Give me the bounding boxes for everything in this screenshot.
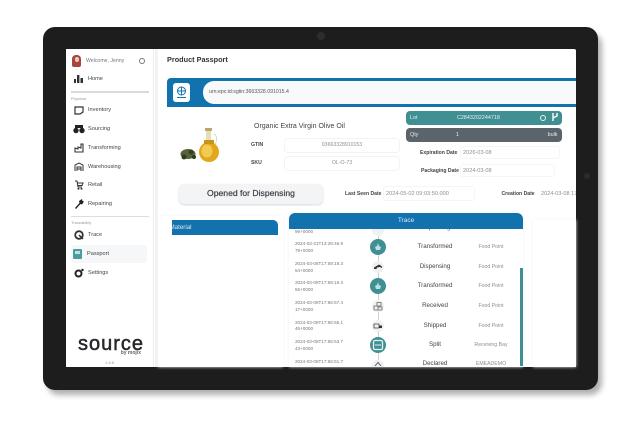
sidebar bbox=[66, 49, 154, 367]
icon: row 7 bbox=[370, 337, 386, 353]
icon: row 3 bbox=[372, 261, 384, 273]
section label: traceability: Traceability bbox=[71, 220, 91, 225]
passport mark bbox=[75, 251, 80, 254]
row 4 timestamp: 2024-03-08T17:59:19.3 bbox=[295, 280, 343, 285]
row 6 timestamp: 46+0000 bbox=[295, 326, 313, 331]
url field bbox=[203, 81, 576, 104]
nav: settings: Settings bbox=[88, 270, 108, 276]
row 4 timestamp bbox=[295, 280, 343, 292]
material header bbox=[172, 220, 278, 235]
panel: right blank bbox=[533, 220, 576, 367]
icon: row 4 bbox=[370, 278, 386, 294]
row 1 event: Dispensing bbox=[420, 224, 450, 231]
lot branch icon bbox=[552, 113, 558, 121]
row 8 event: Declared bbox=[423, 360, 447, 367]
last seen value: 2024-05-02 09:03:50.000 bbox=[386, 191, 449, 197]
row 3 location: Food Point bbox=[478, 264, 504, 270]
row 7 event: Split bbox=[429, 341, 441, 348]
nav: trace: Trace bbox=[88, 232, 102, 238]
panel: material bbox=[158, 216, 283, 367]
sku field bbox=[284, 156, 400, 170]
icon: warehousing bbox=[74, 162, 84, 171]
row 4 location: Food Point bbox=[478, 283, 504, 289]
content gutter bbox=[155, 49, 158, 367]
row 2 timestamp bbox=[295, 241, 343, 252]
row 7 timestamp: 2024-03-08T17:56:53.7 bbox=[295, 339, 343, 344]
panel: trace bbox=[289, 213, 523, 367]
row 5 location: Food Point bbox=[478, 303, 504, 309]
lot value: C2843202244718 bbox=[457, 114, 500, 120]
nav: inventory: Inventory bbox=[88, 107, 111, 113]
row 1 clipped: 96+0000 bbox=[295, 229, 313, 234]
last seen label: Last Seen Date bbox=[345, 191, 382, 197]
icon: row 2 bbox=[370, 239, 386, 255]
row 4 event: Transformed bbox=[418, 282, 452, 289]
row 5 timestamp: 17+0000 bbox=[295, 306, 313, 312]
row 3 timestamp: 2024-03-08T17:59:19.3 bbox=[295, 261, 343, 266]
nav: repairing: Repairing bbox=[88, 201, 112, 207]
status: opened for dispensing: Opened for Dispensing bbox=[207, 188, 295, 198]
row 2 timestamp: 2024-03-21T13:28:46.9 bbox=[295, 241, 343, 246]
row 3 timestamp: 54+0000 bbox=[295, 268, 313, 272]
side sensor bbox=[584, 173, 590, 179]
qty label: Qty bbox=[410, 132, 418, 138]
qty bar bbox=[406, 128, 562, 142]
icon: row 5 bbox=[372, 300, 384, 312]
logo: source by mojix bbox=[78, 332, 144, 356]
url field: urn:epc:id:sgtin:3663328.091015.4 bbox=[209, 89, 289, 95]
row 7 location: Receiving Bay bbox=[474, 342, 508, 348]
row 2 location: Food Point bbox=[478, 244, 504, 250]
row 6 event: Shipped bbox=[424, 322, 446, 329]
power icon bbox=[139, 58, 145, 64]
expiration value: 2026-03-08 bbox=[463, 150, 492, 156]
sku field: OL-O-73 bbox=[332, 160, 352, 166]
row 6 timestamp: 2024-03-08T17:56:55.1 bbox=[295, 320, 343, 324]
last seen field bbox=[383, 186, 475, 201]
status: opened for dispensing bbox=[179, 184, 323, 204]
trace scrollbar bbox=[520, 268, 522, 366]
heading: product passport: Product Passport bbox=[167, 55, 228, 64]
row 3 event: Dispensing bbox=[420, 263, 450, 270]
icon: globe bbox=[173, 83, 190, 102]
trace header: Trace bbox=[398, 217, 414, 224]
gtin field: 03663328910153 bbox=[322, 142, 362, 148]
icon: transforming bbox=[74, 144, 84, 152]
nav: transforming: Transforming bbox=[88, 145, 121, 151]
icon: retail bbox=[75, 180, 84, 190]
section label: physical: Physical bbox=[71, 96, 86, 100]
gtin label: GTIN bbox=[251, 142, 263, 148]
row 7 timestamp: 43+0000 bbox=[295, 346, 313, 350]
row 6 location: Food Point bbox=[478, 323, 504, 329]
packaging field bbox=[460, 164, 555, 177]
icon: settings bbox=[74, 268, 84, 278]
row 4 timestamp: 55+0000 bbox=[295, 286, 313, 292]
tablet bbox=[43, 27, 598, 390]
nav: warehousing: Warehousing bbox=[88, 164, 121, 170]
gtin field bbox=[284, 138, 400, 153]
nav: passport: Passport bbox=[87, 251, 109, 257]
product image: olive oil bbox=[180, 128, 219, 162]
row 1 location: Food Point bbox=[478, 225, 504, 231]
expiration label: Expiration Date bbox=[420, 150, 457, 156]
row 5 event: Received bbox=[422, 302, 448, 309]
icon: row 6 bbox=[372, 320, 384, 332]
icon: trace bbox=[74, 230, 84, 240]
row 5 timestamp: 2024-03-08T17:56:57.4 bbox=[295, 300, 343, 305]
row 7 timestamp bbox=[295, 339, 343, 350]
avatar bbox=[72, 55, 81, 67]
icon: passport bbox=[73, 249, 82, 259]
packaging label: Packaging Date bbox=[421, 168, 459, 174]
qty value: 1 bbox=[456, 132, 459, 138]
globe glyph bbox=[177, 86, 186, 98]
creation label: Creation Date bbox=[502, 191, 535, 197]
icon: home bbox=[74, 75, 83, 83]
trace header bbox=[289, 213, 523, 229]
sku label: SKU bbox=[251, 160, 262, 166]
screen bbox=[66, 49, 576, 367]
logo word: source bbox=[78, 332, 144, 354]
nav: retail: Retail bbox=[88, 182, 102, 188]
row 6 timestamp bbox=[295, 320, 343, 331]
camera bbox=[317, 32, 325, 40]
product name: Organic Extra Virgin Olive Oil bbox=[254, 122, 345, 130]
lot bar bbox=[406, 110, 562, 124]
icon: inventory bbox=[74, 106, 84, 115]
row 2 timestamp: 79+0000 bbox=[295, 248, 313, 252]
avatar face bbox=[74, 57, 78, 62]
logo tagline: by mojix bbox=[121, 350, 141, 356]
icon: sourcing bbox=[73, 125, 85, 134]
expiration field bbox=[460, 146, 560, 159]
url bar bbox=[167, 78, 576, 106]
nav: sourcing: Sourcing bbox=[88, 126, 110, 132]
qty unit: bulk bbox=[548, 132, 558, 138]
divider bbox=[71, 91, 149, 92]
lot clock icon bbox=[540, 114, 546, 120]
welcome text: Welcome, Jenny bbox=[86, 58, 124, 64]
row 8 timestamp: 2024-03-08T17:56:51.7 bbox=[295, 358, 343, 364]
divider bbox=[71, 216, 149, 217]
row 8 location: EMEADEMO bbox=[476, 361, 506, 367]
row 5 timestamp bbox=[295, 300, 343, 312]
icon: row 1 bbox=[372, 224, 384, 236]
row 2 event: Transformed bbox=[418, 243, 452, 250]
icon: row 8 bbox=[372, 360, 384, 367]
trace connector line bbox=[378, 229, 379, 367]
icon: repairing bbox=[75, 199, 84, 209]
tablet shadow bbox=[47, 33, 602, 395]
nav highlight: passport bbox=[71, 245, 147, 263]
packaging value: 2024-03-08 bbox=[463, 168, 492, 174]
row 3 timestamp bbox=[295, 261, 343, 272]
lot label: Lot bbox=[410, 114, 418, 120]
version: 1.8.8 bbox=[105, 360, 114, 365]
nav: home: Home bbox=[88, 76, 103, 82]
